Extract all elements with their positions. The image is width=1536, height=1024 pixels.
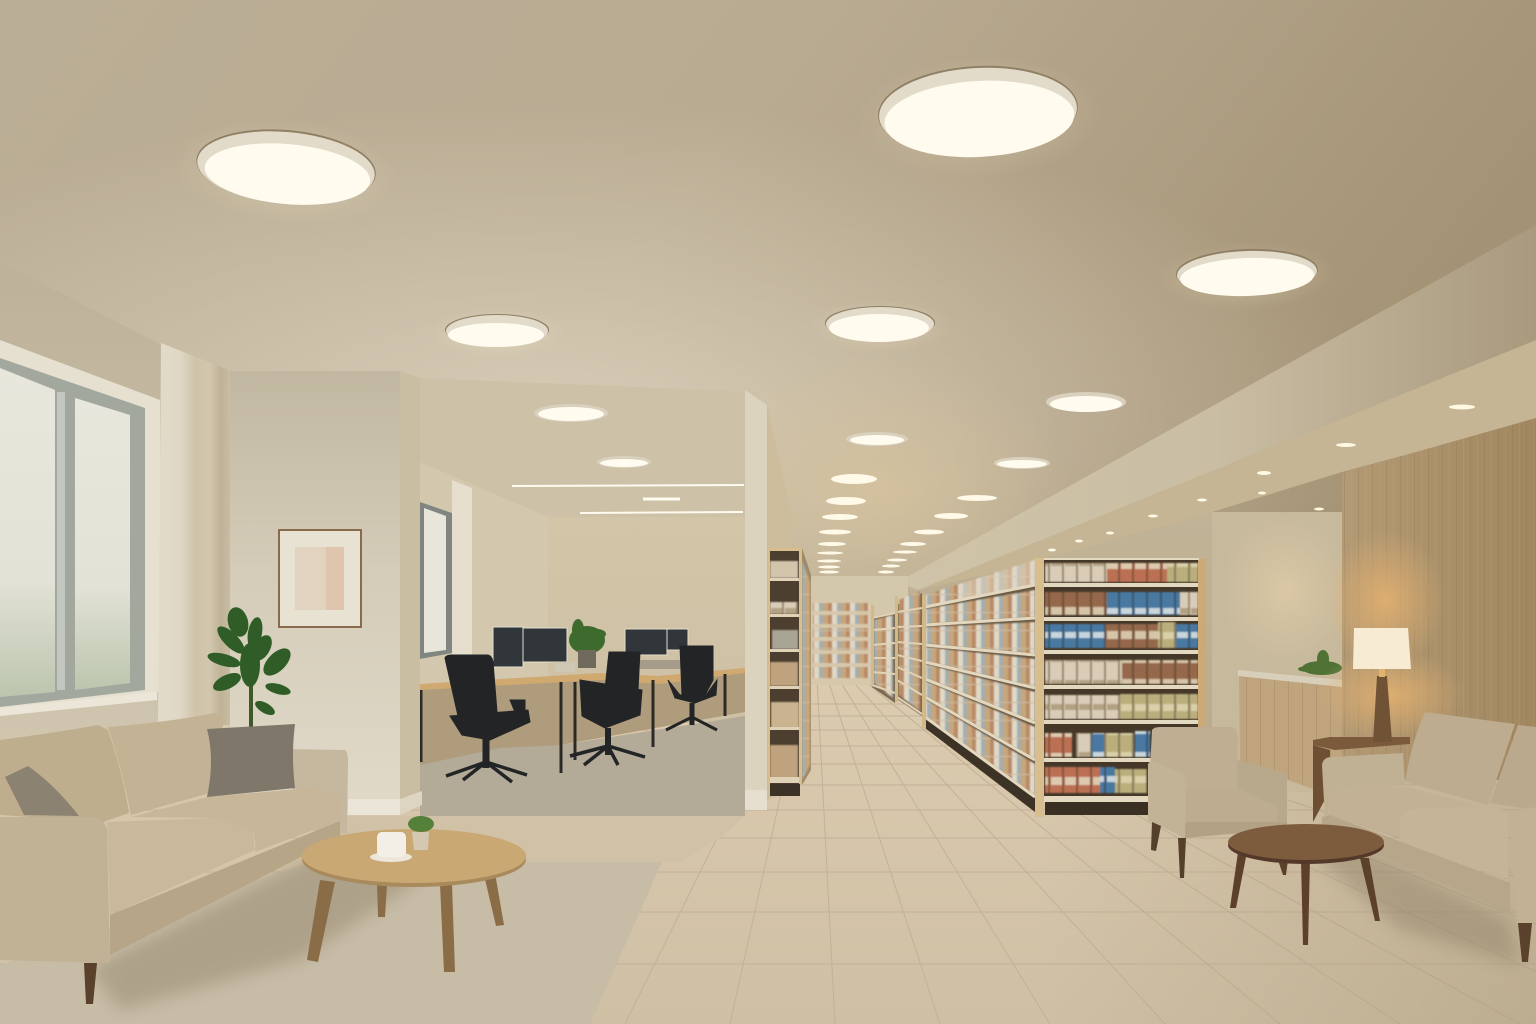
shelf row 6 [1045, 731, 1150, 757]
shelf section far [871, 605, 895, 703]
sofa leg [84, 963, 97, 1004]
downlights [1048, 404, 1475, 552]
shelf row 1 [1045, 563, 1198, 582]
coffee table [302, 816, 526, 972]
light 10 [994, 457, 1050, 469]
seat cushion right [131, 789, 340, 852]
pillow grey [207, 724, 295, 797]
rug shadow [90, 842, 420, 1010]
table lamp [1353, 628, 1411, 742]
desk modesty panels [420, 672, 745, 765]
office chair 2 [570, 652, 645, 765]
office side wall [420, 462, 548, 770]
light 9 [597, 456, 651, 468]
monitors [493, 627, 688, 667]
left wall [0, 262, 162, 745]
office plant [569, 619, 606, 668]
light 4 [808, 300, 952, 352]
light 2 [850, 50, 1106, 186]
lower ceiling right [918, 340, 1536, 590]
floor plant [206, 605, 295, 732]
column [230, 371, 422, 815]
shelf row 5 [1045, 694, 1198, 719]
right sofa shadow [1320, 830, 1520, 965]
shelf section near [922, 560, 1035, 812]
pillow tan [5, 766, 79, 816]
soffit side [898, 225, 1536, 590]
office chair 1 [445, 655, 530, 782]
right back wall [1040, 512, 1342, 800]
office window [420, 502, 452, 659]
shelf section middle [895, 591, 922, 716]
light 7 [534, 404, 608, 422]
back wall lit panel [1212, 512, 1350, 792]
light 6 [1046, 392, 1126, 412]
counter plant [1298, 650, 1342, 675]
partition wall [745, 390, 792, 810]
far end shelf [811, 600, 871, 685]
right sofa [1322, 712, 1536, 962]
area rug [0, 862, 662, 1024]
left sofa [0, 713, 348, 1004]
left arm [0, 817, 110, 963]
reception counter [1238, 670, 1342, 800]
floor band by rug [300, 816, 745, 865]
coffee cup [370, 832, 412, 862]
ceiling lights [167, 50, 1338, 574]
shelf row 7 [1045, 767, 1147, 793]
ceiling [0, 0, 1536, 620]
window [0, 340, 160, 716]
desks [420, 668, 745, 773]
office chair 3 [666, 646, 717, 730]
shelf row 3 [1045, 622, 1198, 648]
seat cushion left [107, 818, 255, 915]
office ceiling [420, 378, 760, 517]
side coffee table [1228, 824, 1384, 945]
light 8 [846, 432, 908, 446]
shelf row 4 [1045, 660, 1198, 684]
left aisle shelf [768, 548, 811, 796]
right angled shelves [871, 560, 1035, 812]
office ceiling strip lights [512, 485, 744, 513]
shelf row 2 [1045, 592, 1198, 615]
office carpet [420, 716, 745, 816]
receding lights [817, 474, 997, 574]
office room [420, 378, 760, 816]
office back wall [548, 517, 748, 722]
light 5 [427, 308, 567, 358]
desk items [555, 660, 710, 672]
sofa base [110, 821, 340, 955]
wood panel wall [1315, 418, 1536, 780]
framed art [278, 529, 362, 628]
right arm [285, 749, 348, 833]
tiled floor [0, 685, 1536, 1024]
light 3 [1156, 239, 1338, 313]
side table [1313, 737, 1410, 822]
small plant [408, 816, 434, 850]
far aisle back wall [808, 576, 908, 636]
front shelf unit [1035, 558, 1206, 817]
armchair [1148, 727, 1287, 878]
light 1 [167, 110, 405, 234]
curtain [158, 343, 232, 725]
back cushions [0, 713, 223, 822]
